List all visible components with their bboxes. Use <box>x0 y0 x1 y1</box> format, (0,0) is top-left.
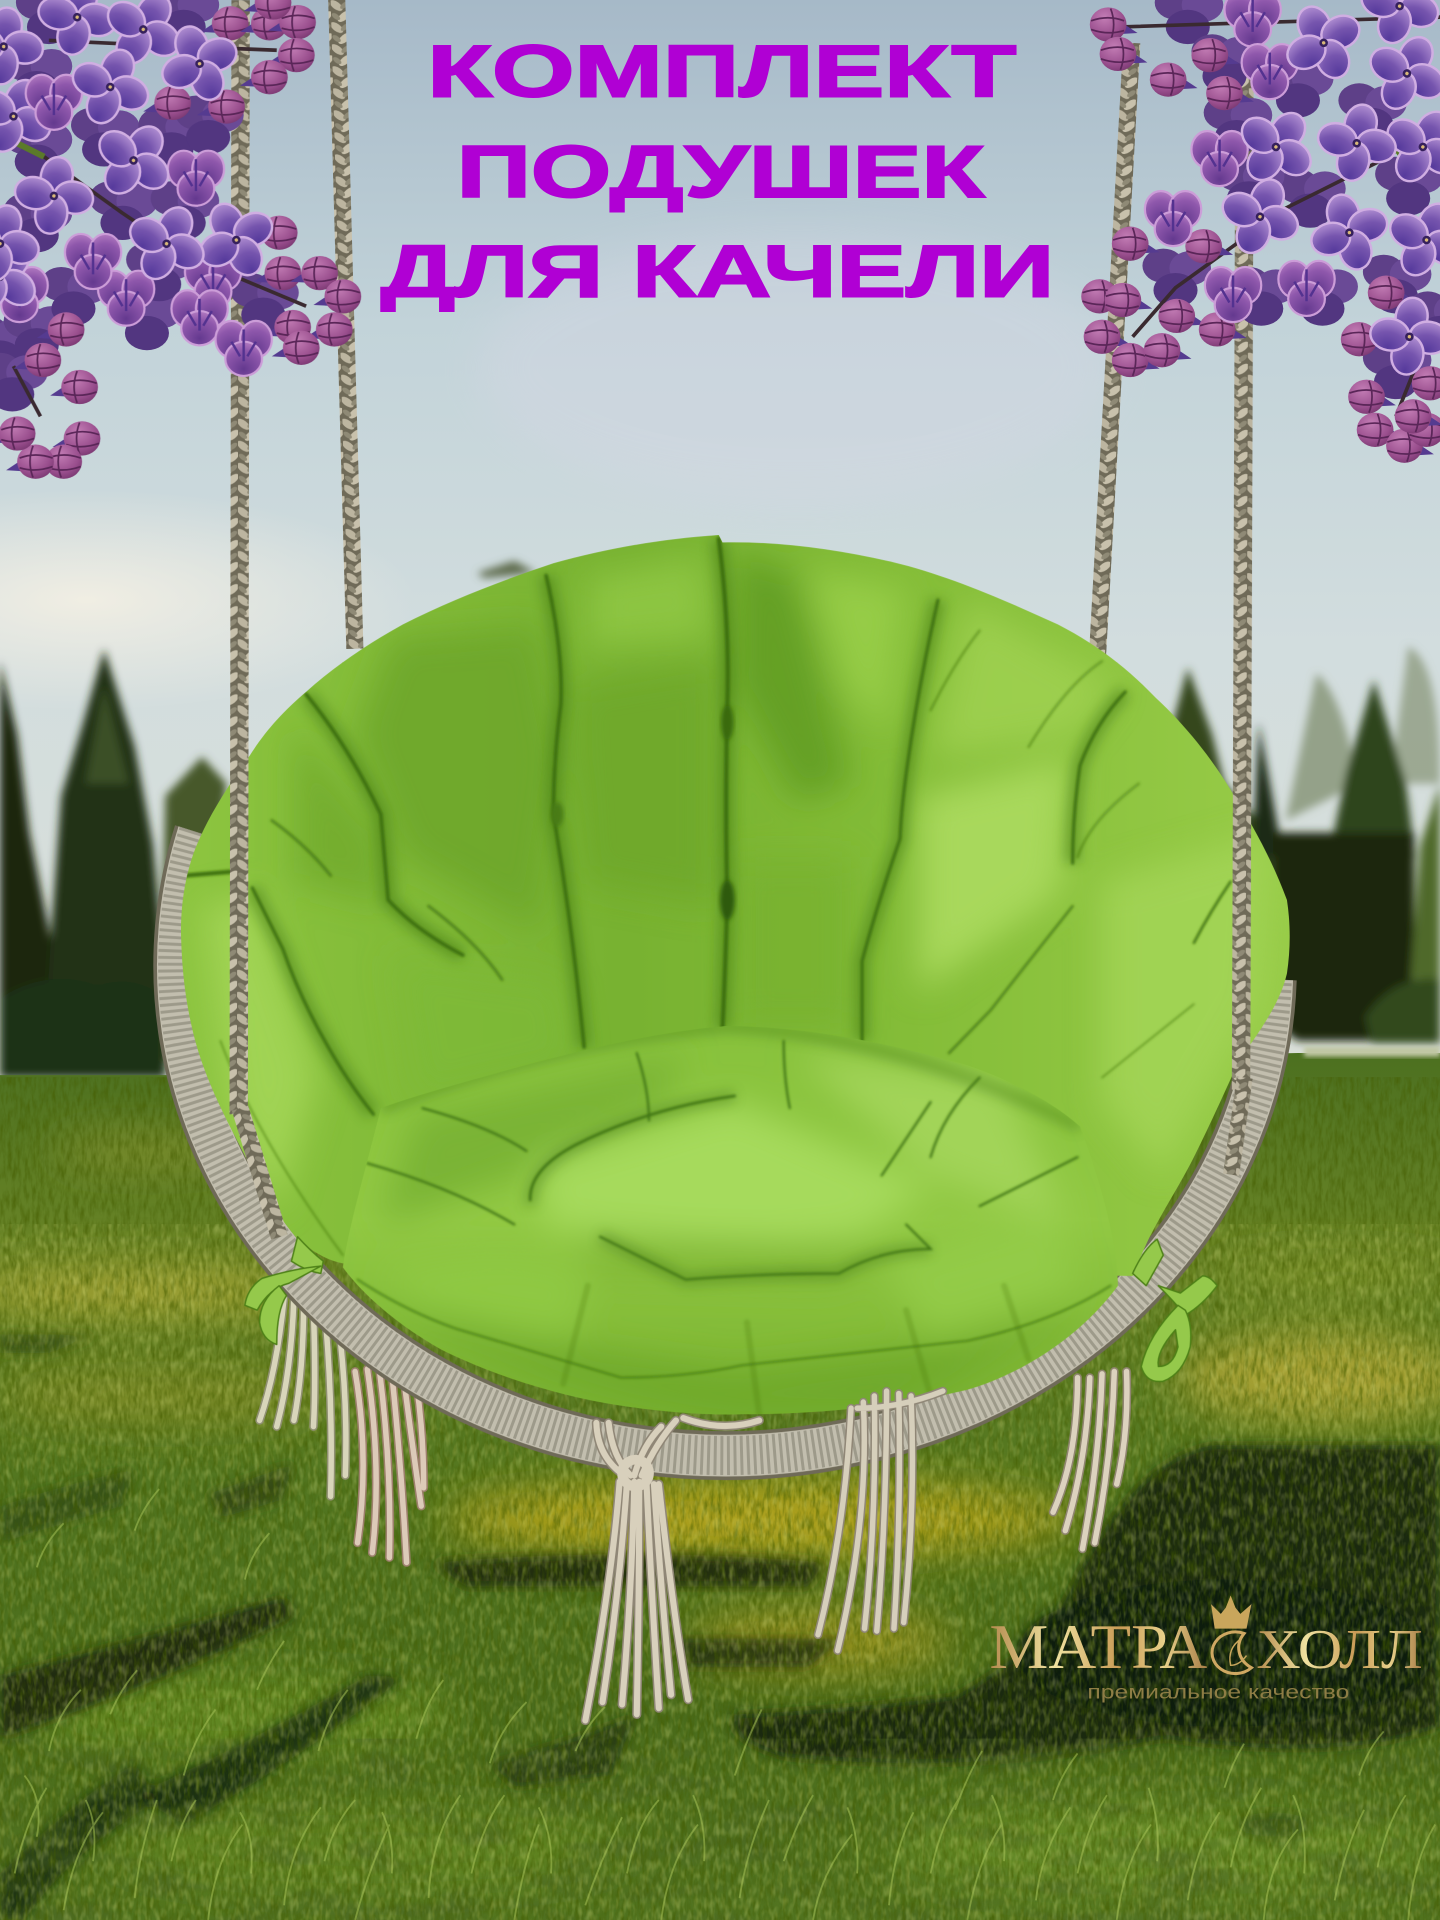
background trees and hedges <box>0 561 1440 1078</box>
green cushion back <box>181 535 1290 1276</box>
back ropes <box>328 0 1140 655</box>
tassel right <box>1053 1371 1127 1549</box>
right tie <box>1133 1239 1217 1382</box>
wicker ring <box>178 833 1272 1456</box>
lawn <box>0 1047 1440 1920</box>
tassel far left <box>260 1298 346 1496</box>
title line 2: ПОДУШЕК <box>457 130 985 213</box>
title line 3: ДЛЯ КАЧЕЛИ <box>381 229 1054 312</box>
sky background <box>0 0 1440 1078</box>
cushion fold seams <box>185 539 1231 1255</box>
macrame tassels behind the ring <box>260 1298 1127 1562</box>
green seat cushion <box>343 1026 1118 1420</box>
grass blades <box>15 1489 1435 1920</box>
title <box>381 30 1054 312</box>
title line 1: КОМПЛЕКТ <box>427 30 1017 113</box>
front ropes <box>229 0 1254 1239</box>
left tie <box>245 1237 323 1344</box>
lilac branch: top left <box>0 0 361 479</box>
logo emblem: crown and crescent <box>1211 1596 1251 1674</box>
tufts <box>720 880 735 920</box>
cushion fold shadows <box>252 539 1125 1114</box>
macrame knot tassels in front <box>585 1391 943 1720</box>
logo tagline: премиальное качество <box>1087 1682 1349 1703</box>
right front tassel <box>818 1391 943 1651</box>
cushion ties <box>245 1237 1217 1382</box>
logo <box>989 1596 1423 1703</box>
lilac branch: top right <box>1081 0 1440 463</box>
tassel left <box>355 1369 424 1562</box>
centre tassel <box>585 1418 759 1720</box>
logo wordmark left: МАТРА <box>989 1611 1207 1682</box>
logo wordmark right: ХОЛЛ <box>1256 1619 1423 1681</box>
